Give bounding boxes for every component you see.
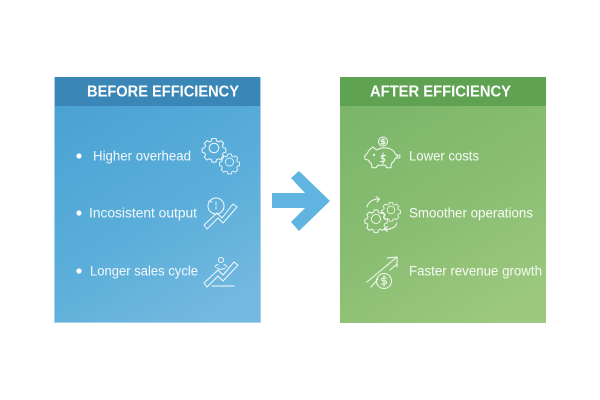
heading band: before efficiency xyxy=(55,77,260,106)
list item: smoother operations: Smoother operations xyxy=(409,206,533,220)
arrow xyxy=(272,171,330,231)
list item: faster revenue growth: Faster revenue growth xyxy=(409,264,542,278)
list item: longer sales cycle xyxy=(76,258,238,287)
icon: person climbing trend xyxy=(204,258,238,287)
list item: inconsistent output xyxy=(76,198,237,229)
icon: gears with rotation arrows xyxy=(365,196,400,232)
panel: after efficiency xyxy=(340,77,546,323)
list item: higher overhead: Higher overhead xyxy=(93,148,191,164)
panel: before efficiency xyxy=(54,77,260,322)
list item: lower costs: Lower costs xyxy=(409,148,479,164)
list item: longer sales cycle: Longer sales cycle xyxy=(90,264,198,278)
heading band: before efficiency: BEFORE EFFICIENCY xyxy=(87,84,239,100)
icon: piggy bank with coin xyxy=(364,137,400,168)
icon: gears xyxy=(202,138,240,174)
heading band: after efficiency: AFTER EFFICIENCY xyxy=(370,84,511,100)
list item: inconsistent output: Incosistent output xyxy=(89,206,197,220)
list item: smoother operations xyxy=(365,196,533,232)
icon: clock over zigzag trend xyxy=(204,198,237,229)
list item: faster revenue growth xyxy=(367,257,542,288)
list item: higher overhead xyxy=(76,138,240,174)
icon: growth arrow with dollar coin xyxy=(367,257,397,288)
list item: lower costs xyxy=(364,137,479,168)
heading band: after efficiency xyxy=(340,77,546,106)
